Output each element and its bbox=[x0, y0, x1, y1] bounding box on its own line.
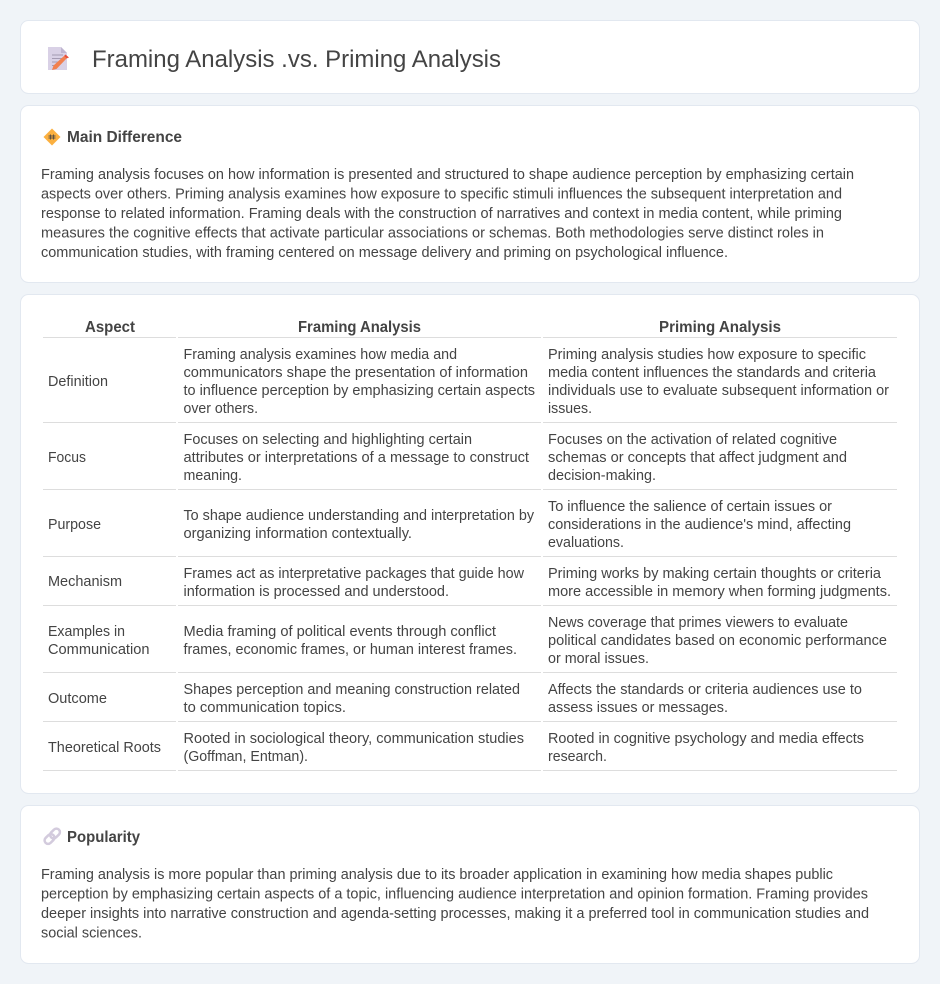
panel: main difference bbox=[20, 106, 920, 282]
panel: popularity bbox=[20, 806, 920, 964]
text block: main difference: Framing analysis focuses on how information is presented and structured to shape audience perception by emphasizing certain bbox=[41, 167, 854, 183]
row: mechanism: Priming works by making certain thoughts or criteria bbox=[548, 566, 881, 582]
row: examples in communication: or moral issues. bbox=[548, 651, 649, 667]
row: definition: issues. bbox=[548, 401, 592, 417]
row: focus bbox=[48, 432, 847, 484]
table header bbox=[85, 319, 781, 336]
text block: popularity: deeper insights into narrative construction and agenda-setting processes, making it a preferred tool in communication studies and bbox=[41, 906, 869, 922]
row: outcome: to communication topics. bbox=[184, 700, 346, 716]
row: outcome: Shapes perception and meaning construction related bbox=[184, 682, 520, 698]
table header: Framing Analysis bbox=[298, 319, 421, 336]
text block: popularity: Framing analysis is more popular than priming analysis due to its broader application in examining how media shapes public bbox=[41, 867, 833, 883]
row: theoretical roots: Rooted in sociological theory, communication studies bbox=[184, 731, 524, 747]
text block: popularity: perception by emphasizing certain aspects of a topic, influencing audience interpretation and opinion formation. Framing provides bbox=[41, 886, 868, 902]
row: examples in communication: Communication bbox=[48, 642, 150, 658]
text block: main difference: response to related information. Framing deals with the construction of narratives and context in media content, while priming bbox=[41, 206, 842, 222]
row: purpose bbox=[48, 499, 851, 551]
row: outcome: Affects the standards or criteria audiences use to bbox=[548, 682, 862, 698]
text block: main difference: communication studies, with framing centered on message delivery and priming on psychological influence. bbox=[41, 245, 728, 261]
text block: main difference: measures the cognitive effects that activate particular associations or schemas. Both methodologies serve distinct roles in bbox=[41, 226, 824, 242]
icon: memo with pencil bbox=[48, 47, 69, 70]
row: mechanism: more accessible in memory when forming judgments. bbox=[548, 584, 891, 600]
row: examples in communication: Media framing of political events through conflict bbox=[184, 624, 496, 640]
row: theoretical roots: Theoretical Roots bbox=[48, 740, 161, 756]
row: focus: Focuses on the activation of related cognitive bbox=[548, 432, 837, 448]
text block: main difference bbox=[41, 167, 854, 261]
row: mechanism: Frames act as interpretative packages that guide how bbox=[184, 566, 525, 582]
row: theoretical roots bbox=[48, 731, 864, 765]
title: Framing Analysis .vs. Priming Analysis bbox=[92, 46, 501, 73]
row: examples in communication bbox=[48, 615, 887, 667]
text block: main difference: aspects over others. Priming analysis examines how exposure to specific stimuli influences the subsequent interpretation and bbox=[41, 186, 842, 202]
row: focus: decision-making. bbox=[548, 468, 656, 484]
heading: main difference: Main Difference bbox=[67, 129, 182, 146]
heading: popularity: Popularity bbox=[67, 829, 140, 846]
row: definition: communicators shape the presentation of information bbox=[184, 365, 528, 381]
row: theoretical roots: Rooted in cognitive psychology and media effects bbox=[548, 731, 864, 747]
row: definition: over others. bbox=[184, 401, 258, 417]
row: focus: schemas or concepts that affect judgment and bbox=[548, 450, 847, 466]
row: mechanism: Mechanism bbox=[48, 574, 122, 590]
row: mechanism: information is processed and understood. bbox=[184, 584, 449, 600]
row: examples in communication: political candidates based on economic performance bbox=[548, 633, 887, 649]
row: definition bbox=[48, 347, 889, 417]
row: purpose: Purpose bbox=[48, 517, 101, 533]
panel: header bbox=[20, 20, 920, 94]
row: mechanism bbox=[48, 566, 891, 600]
row: purpose: To shape audience understanding and interpretation by bbox=[184, 508, 535, 524]
row: definition: Definition bbox=[48, 374, 108, 390]
row: definition: media content influences the standards and criteria bbox=[548, 365, 876, 381]
icon: chain link bbox=[43, 827, 61, 845]
row: definition: Framing analysis examines how media and bbox=[184, 347, 457, 363]
panel: comparison table bbox=[20, 294, 920, 794]
row: examples in communication: News coverage that primes viewers to evaluate bbox=[548, 615, 848, 631]
row: outcome: Outcome bbox=[48, 691, 107, 707]
icon: orange diamond sign bbox=[44, 128, 60, 146]
row: definition: to influence perception by emphasizing certain aspects bbox=[184, 383, 535, 399]
row: definition: Priming analysis studies how exposure to specific bbox=[548, 347, 866, 363]
row: examples in communication: frames, economic frames, or human interest frames. bbox=[184, 642, 517, 658]
row: focus: Focuses on selecting and highlighting certain bbox=[184, 432, 472, 448]
text block: popularity: social sciences. bbox=[41, 926, 142, 942]
row: outcome: assess issues or messages. bbox=[548, 700, 728, 716]
row: purpose: evaluations. bbox=[548, 535, 624, 551]
text block: popularity bbox=[41, 867, 869, 942]
row: focus: Focus bbox=[48, 450, 86, 466]
row: purpose: organizing information contextually. bbox=[184, 526, 412, 542]
row: purpose: To influence the salience of certain issues or bbox=[548, 499, 832, 515]
row: focus: attributes or interpretations of a message to construct bbox=[184, 450, 529, 466]
row: outcome bbox=[48, 682, 862, 716]
row: examples in communication: Examples in bbox=[48, 624, 125, 640]
row: theoretical roots: (Goffman, Entman). bbox=[184, 749, 308, 765]
table header: Priming Analysis bbox=[659, 319, 781, 336]
row: focus: meaning. bbox=[184, 468, 242, 484]
row: theoretical roots: research. bbox=[548, 749, 607, 765]
row: purpose: considerations in the audience's mind, affecting bbox=[548, 517, 851, 533]
table header: Aspect bbox=[85, 319, 136, 336]
row: definition: individuals use to evaluate subsequent information or bbox=[548, 383, 889, 399]
